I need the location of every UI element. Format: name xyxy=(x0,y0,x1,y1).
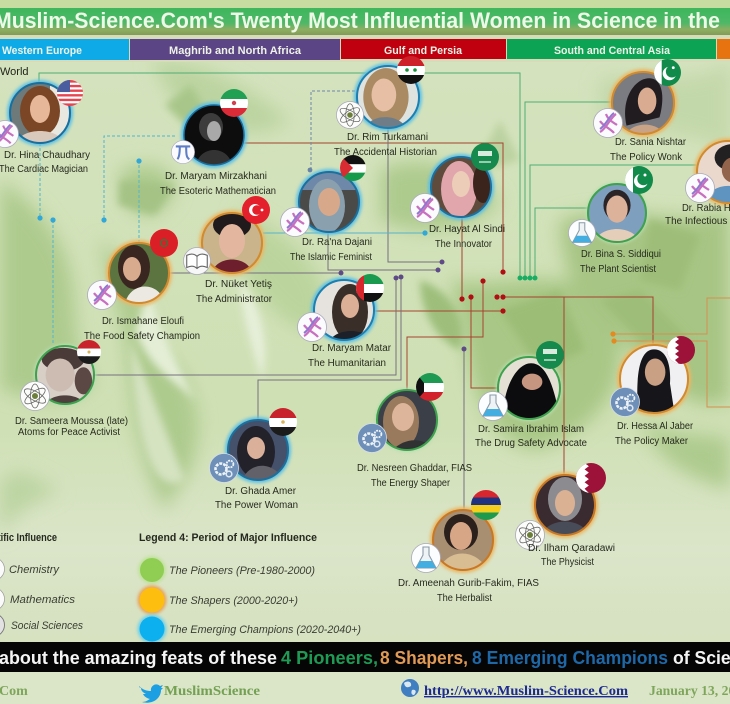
icon: DNA xyxy=(298,312,326,342)
icon: flask xyxy=(412,544,440,572)
person: Ra'na Dajani: The Islamic Feminist xyxy=(290,252,372,263)
person: Bina Siddiqui xyxy=(568,166,661,275)
person: Ghada Amer: Dr. Ghada Amer xyxy=(225,486,297,497)
person: Hayat Al Sindi: Dr. Hayat Al Sindi xyxy=(429,224,505,235)
legend: period of major influence: The Shapers (2000-2020+) xyxy=(169,595,298,607)
person: Hessa Al Jaber: The Policy Maker xyxy=(615,436,689,447)
person: Sameera Moussa: Dr. Sameera Moussa (late) xyxy=(15,416,128,427)
person: Sameera Moussa xyxy=(15,340,128,438)
flag: Egypt xyxy=(269,408,297,436)
icon: book xyxy=(183,247,211,275)
call to action bar xyxy=(0,642,730,672)
icon: DNA xyxy=(0,120,19,148)
person: Ilham Qaradawi xyxy=(516,463,615,568)
person: Nesreen Ghaddar: Dr. Nesreen Ghaddar, FIAS xyxy=(357,463,472,474)
legend: period of major influence: The Emerging Champions (2020-2040+) xyxy=(169,624,361,636)
person: Maryam Mirzakhani xyxy=(160,89,276,197)
person: Rabia Hussain xyxy=(665,138,730,227)
person: Sania Nishtar: The Policy Wonk xyxy=(610,152,683,163)
call to action bar: about the amazing feats of these xyxy=(0,647,277,668)
person: Rim Turkamani: The Accidental Historian xyxy=(334,147,437,158)
person: Hayat Al Sindi xyxy=(410,143,505,250)
person: Ismahane Eloufi: Dr. Ismahane Eloufi xyxy=(102,316,184,327)
flag: Palestine xyxy=(340,155,366,181)
flag: USA xyxy=(57,80,83,106)
person: Nesreen Ghaddar xyxy=(357,373,472,489)
person: Maryam Matar: The Humanitarian xyxy=(308,358,386,369)
icon: DNA xyxy=(280,208,310,236)
icon: gears xyxy=(210,454,238,482)
region legend bar: Western Europe xyxy=(2,45,82,57)
person: Hessa Al Jaber: Dr. Hessa Al Jaber xyxy=(617,421,694,432)
legend: period of major influence: The Pioneers (Pre-1980-2000) xyxy=(169,565,315,577)
person: Nuket Yetis xyxy=(183,196,273,305)
flag: UAE xyxy=(356,274,384,302)
person: Samira Ibrahim Islam: The Drug Safety Advocate xyxy=(475,438,587,449)
person: Hina Chaudhary: Dr. Hina Chaudhary xyxy=(4,150,90,161)
person: Hina Chaudhary xyxy=(0,80,90,175)
person: Ameenah Gurib-Fakim: The Herbalist xyxy=(437,593,492,604)
person: Ameenah Gurib-Fakim: Dr. Ameenah Gurib-Fakim, FIAS xyxy=(398,578,539,589)
person: Ghada Amer xyxy=(210,408,298,511)
person: Ra'na Dajani xyxy=(280,155,372,263)
person: Maryam Matar: Dr. Maryam Matar xyxy=(312,343,392,354)
icon: DNA xyxy=(410,194,440,222)
person: Samira Ibrahim Islam: Dr. Samira Ibrahim Islam xyxy=(478,424,584,435)
person: Ismahane Eloufi: The Food Safety Champion xyxy=(84,331,200,342)
person: Ghada Amer: The Power Woman xyxy=(215,500,298,511)
person: Sania Nishtar: Dr. Sania Nishtar xyxy=(615,137,687,148)
footer: http://www.Muslim-Science.Com xyxy=(424,684,628,699)
flag: Pakistan xyxy=(625,166,653,194)
icon: DNA xyxy=(88,280,116,310)
region legend bar: Maghrib and North Africa xyxy=(169,45,302,57)
call to action bar: 4 Pioneers, xyxy=(281,647,378,668)
legend: period of major influence xyxy=(138,532,361,644)
region legend bar xyxy=(0,35,730,62)
flag: Egypt xyxy=(77,340,101,364)
icon: DNA xyxy=(686,174,714,202)
icon: atom xyxy=(20,382,50,410)
connector lines xyxy=(37,73,730,515)
icon: twitter bird xyxy=(139,684,163,703)
footer: MuslimScience xyxy=(164,684,260,699)
person: Ameenah Gurib-Fakim xyxy=(398,490,539,604)
person: Ra'na Dajani: Dr. Ra'na Dajani xyxy=(302,237,372,248)
flag: Qatar xyxy=(576,463,606,493)
flag: Saudi Arabia xyxy=(471,143,499,171)
legend: period of major influence: Legend 4: Period of Major Influence xyxy=(139,532,317,544)
person: Ilham Qaradawi: Dr. Ilham Qaradawi xyxy=(528,543,615,554)
person: Nesreen Ghaddar: The Energy Shaper xyxy=(371,478,451,489)
flag: Syria xyxy=(397,56,425,84)
person: Samira Ibrahim Islam xyxy=(475,341,587,449)
person: Bina Siddiqui: The Plant Scientist xyxy=(580,264,656,275)
person: Nuket Yetis: Dr. Nüket Yetiş xyxy=(205,279,272,290)
region legend bar: South and Central Asia xyxy=(554,45,671,57)
icon: flask xyxy=(568,219,596,247)
icon: gears xyxy=(358,424,386,452)
icon: gears xyxy=(610,388,640,416)
legend: scientific influence: Mathematics xyxy=(10,594,76,606)
person: Ilham Qaradawi: The Physicist xyxy=(541,557,594,568)
title band: Muslim-Science.Com's Twenty Most Influential Women in Science in the xyxy=(0,8,720,33)
icon: pi xyxy=(171,140,195,164)
call to action bar: 8 Emerging Champions xyxy=(472,647,668,668)
flag: Pakistan xyxy=(654,59,681,86)
person: Ismahane Eloufi xyxy=(84,229,200,342)
flag: Kuwait xyxy=(416,373,444,401)
flag: Iran xyxy=(220,89,248,117)
legend: scientific influence: Social Sciences xyxy=(11,620,83,632)
person: Nuket Yetis: The Administrator xyxy=(196,294,273,305)
person: Sameera Moussa: Atoms for Peace Activist xyxy=(18,427,120,438)
legend: scientific influence: Chemistry xyxy=(9,564,61,576)
person: Bina Siddiqui: Dr. Bina S. Siddiqui xyxy=(581,249,661,260)
call to action bar: 8 Shapers, xyxy=(380,647,468,668)
flag: Turkey xyxy=(242,196,270,224)
legend: scientific influence xyxy=(0,532,83,636)
person: Sania Nishtar xyxy=(594,59,687,163)
person: Maryam Matar xyxy=(298,274,392,369)
person: Hina Chaudhary: The Cardiac Magician xyxy=(0,164,88,175)
person: Maryam Mirzakhani: The Esoteric Mathematician xyxy=(160,186,276,197)
flag: Saudi Arabia xyxy=(536,341,564,369)
icon: atom xyxy=(336,101,364,129)
person: Maryam Mirzakhani: Dr. Maryam Mirzakhani xyxy=(165,171,267,182)
flag: Mauritius xyxy=(471,490,501,520)
flag: Morocco xyxy=(150,229,178,257)
person: Rim Turkamani xyxy=(334,56,437,158)
person: Hessa Al Jaber xyxy=(610,336,695,447)
icon: flask xyxy=(478,392,508,420)
person: Rim Turkamani: Dr. Rim Turkamani xyxy=(347,132,428,143)
icon: atom xyxy=(516,520,544,550)
icon: globe xyxy=(401,679,419,697)
subtitle fragment: World xyxy=(0,66,29,78)
region legend bar: Gulf and Persia xyxy=(384,45,463,57)
icon: DNA xyxy=(594,108,622,138)
flag: Qatar xyxy=(667,336,695,364)
footer xyxy=(0,672,730,704)
person: Hayat Al Sindi: The Innovator xyxy=(435,239,493,250)
